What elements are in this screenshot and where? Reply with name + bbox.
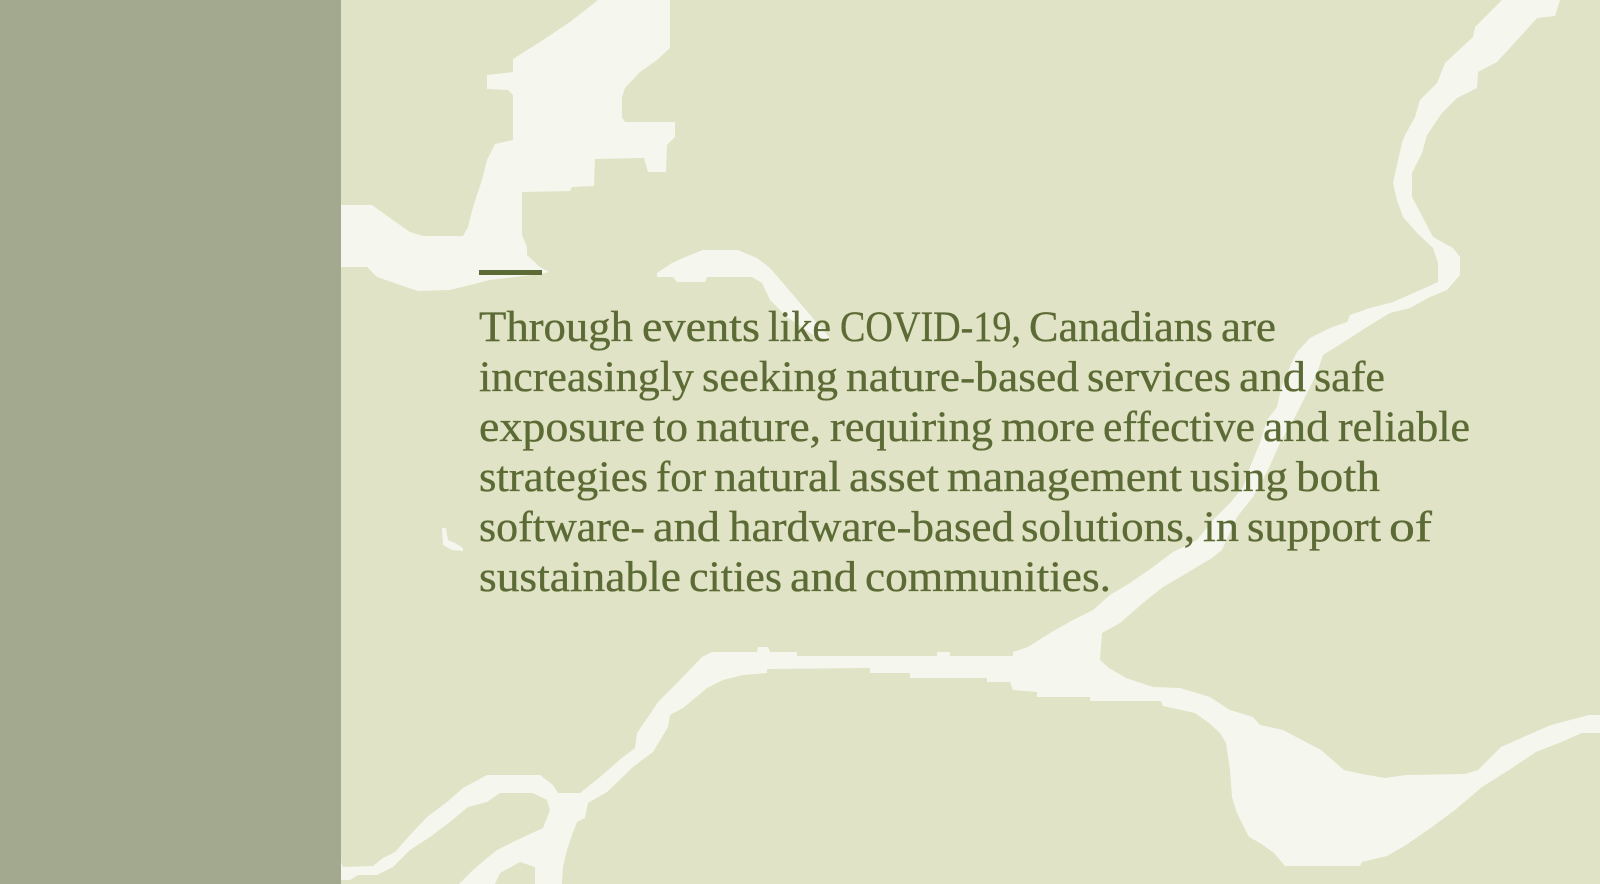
body text: management (947, 454, 1182, 501)
body text: exposure (479, 404, 645, 451)
body text: and (1263, 404, 1329, 451)
body text: solutions, (1021, 504, 1195, 551)
body text: safe (1314, 354, 1385, 401)
body text: both (1296, 454, 1380, 501)
body text: for (656, 454, 706, 501)
body text: of (1389, 504, 1433, 551)
body text: asset (849, 454, 939, 501)
panel: left sidebar (0, 0, 341, 884)
body text: natural (714, 454, 841, 501)
body text: communities. (865, 554, 1111, 601)
accent rule (479, 270, 542, 275)
body text: increasingly (479, 354, 695, 401)
body text: and (653, 504, 720, 551)
river: middle arc (657, 250, 830, 338)
body text: software- (479, 504, 645, 551)
body text: effective (1103, 404, 1255, 451)
body text: nature-based (846, 354, 1079, 401)
body text: hardware-based (729, 504, 1014, 551)
body text: support (1247, 504, 1381, 551)
map: rivers (341, 0, 1600, 884)
body text: sustainable (479, 554, 681, 601)
map background (341, 0, 1600, 884)
body text: Through (479, 304, 633, 351)
body text (479, 304, 1470, 601)
body text: services (1087, 354, 1231, 401)
body text: strategies (479, 454, 648, 501)
body text: and (1239, 354, 1306, 401)
river: main channel and lower pool (341, 0, 1600, 884)
body text: Canadians (1029, 304, 1213, 351)
body text: cities (689, 554, 782, 601)
river: top-left lake (341, 0, 675, 291)
body text: requiring (830, 404, 993, 451)
body text: to (653, 404, 688, 451)
body text: are (1221, 304, 1276, 351)
body text: and (790, 554, 857, 601)
body text: COVID-19, (840, 304, 1021, 351)
body text: events (642, 304, 760, 351)
river: small fragment (442, 528, 463, 551)
body text: like (768, 304, 831, 351)
body text: seeking (702, 354, 838, 401)
body text: reliable (1338, 404, 1470, 451)
body text: more (1001, 404, 1095, 451)
body text: in (1203, 504, 1239, 551)
body text: using (1190, 454, 1288, 501)
body text: nature, (696, 404, 821, 451)
